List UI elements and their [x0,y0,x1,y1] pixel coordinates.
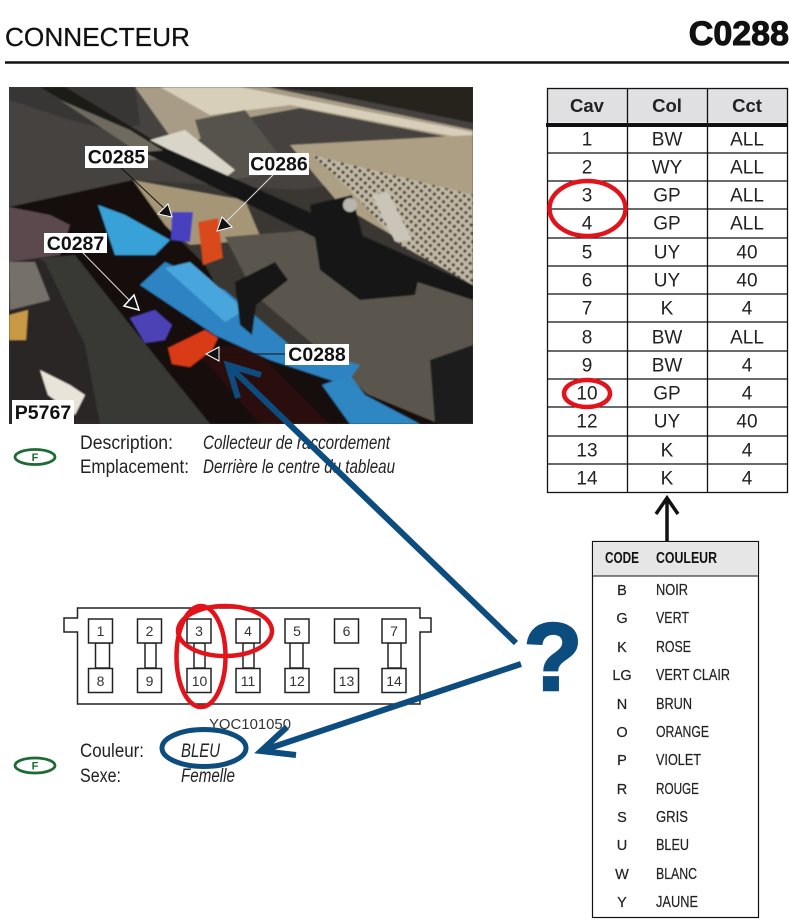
legend codes: G [616,611,628,627]
label: C0288: C0288 [288,344,346,366]
callout: red circle pins 3 and 10 [176,606,226,707]
table rows: ALL [730,214,764,234]
pin numbers: 7 [390,623,398,639]
table rows: 4 [742,468,753,490]
table rows: 3 [582,186,592,206]
legend colour names: ROUGE [656,781,699,798]
pin numbers [97,623,402,689]
legend header: CODE [605,550,639,567]
pin numbers: 2 [146,623,154,639]
legend codes: K [617,640,627,656]
legend colour names: VERT CLAIR [656,667,730,684]
legend codes [612,583,632,911]
label: C0286: C0286 [250,154,308,176]
legend colour names: JAUNE [656,894,698,911]
table rows: 12 [576,412,598,432]
pin numbers: 12 [289,673,305,689]
pin numbers: 6 [343,623,351,639]
legend header: COULEUR [656,550,717,567]
table rows: 4 [742,356,753,376]
table rows: 14 [576,468,598,490]
legend colour names: VIOLET [656,752,701,769]
icon: F badge colour: F [32,760,39,772]
legend codes: R [617,782,627,798]
table rows: 6 [582,270,592,292]
callout: red circle cavities 3 and 4 [550,181,626,236]
panel: wiring table [546,88,788,493]
pin numbers: 1 [97,623,105,639]
table rows: 4 [582,214,593,234]
arrow: legend to table [656,498,678,541]
table rows: GP [653,214,681,234]
icon: F badge description: F [32,452,39,464]
label: C0287: C0287 [47,233,104,255]
table rows: 4 [742,440,753,462]
table rows: UY [654,270,681,292]
legend codes: B [617,583,627,599]
callout: red circle cavity 10 [564,380,610,407]
legend codes: N [617,697,627,713]
table rows: K [661,468,674,490]
panel: location photo [9,87,473,424]
table rows: ALL [730,328,764,348]
title: CONNECTEUR [5,22,190,52]
description text: Derrière le centre du tableau [203,457,395,478]
table rows: 10 [576,384,598,404]
table header [570,95,762,116]
table rows: K [661,440,674,462]
legend codes: S [617,810,627,826]
table rows: 4 [742,298,753,320]
arrow: question to colour [261,664,521,755]
legend codes: W [615,867,629,883]
description text: Emplacement: [80,457,189,478]
table rows: BW [652,130,682,150]
legend colour names: GRIS [656,809,688,826]
table rows: BW [652,356,682,376]
table rows: 9 [582,356,592,376]
connector pinout diagram [64,608,431,704]
table rows: GP [653,384,681,404]
description text: Collecteur de raccordement [203,433,391,454]
arrow: question to photo connector [228,365,516,643]
table rows: 13 [576,440,598,462]
colour and sex text: BLEU [181,741,220,762]
table rows: 8 [582,328,592,348]
photo label pointers [82,165,290,361]
table rows: 40 [736,270,758,292]
legend codes: LG [612,668,632,684]
label: C0285: C0285 [88,146,145,168]
description text [80,433,395,478]
table rows: UY [654,412,681,432]
colour and sex text [80,741,235,787]
colour and sex text: Sexe: [80,766,121,787]
table rows: 2 [582,158,592,178]
legend codes: U [617,838,627,854]
table header: Cav [570,95,605,116]
icon: F badge description [15,450,55,464]
connector code heading: C0288 [689,15,789,53]
table rows: 4 [742,384,753,404]
legend colour names: VERT [656,610,689,627]
legend colour names: ROSE [656,639,691,656]
legend codes: P [617,753,627,769]
label: P5767: P5767 [15,402,71,424]
description text: Description: [80,433,173,454]
table rows: WY [652,158,683,178]
legend header [605,550,717,567]
table rows: UY [654,242,681,264]
colour and sex text: Femelle [181,766,235,787]
table rows [576,130,764,490]
table rows: 7 [582,298,592,320]
table rows: 1 [582,130,592,150]
table rows: 40 [736,412,758,432]
legend colour names [656,582,730,911]
legend codes: Y [617,895,627,911]
pin numbers: 13 [339,673,354,689]
table rows: 40 [736,242,758,264]
table header: Col [652,95,682,116]
part number: YQC101050 [209,717,291,733]
table rows: 5 [582,242,592,264]
pin numbers: 9 [146,673,154,689]
question mark: ? [524,604,582,711]
pin numbers: 8 [97,673,105,689]
table rows: K [661,298,674,320]
legend colour names: NOIR [656,582,688,599]
table rows: ALL [730,130,764,150]
table rows: GP [653,186,681,206]
table rows: BW [652,328,682,348]
legend codes: O [616,725,628,741]
table rows: ALL [730,186,764,206]
panel: colour code legend [592,542,759,918]
table rows: ALL [730,158,764,178]
pin numbers: 11 [241,673,255,689]
table header: Cct [732,95,762,116]
callout: red circle pins 3 and 4 [178,606,272,656]
pin numbers: 5 [293,623,301,639]
pin numbers: 14 [386,673,402,689]
legend colour names: ORANGE [656,724,709,741]
legend colour names: BLEU [656,837,689,854]
pin numbers: 4 [244,623,252,639]
legend colour names: BLANC [656,866,697,883]
pin numbers: 10 [192,673,207,689]
colour and sex text: Couleur: [80,741,144,762]
legend colour names: BRUN [656,696,692,713]
icon: F badge colour [15,758,55,773]
pin numbers: 3 [195,623,203,639]
callout: blue circle colour [162,730,246,766]
